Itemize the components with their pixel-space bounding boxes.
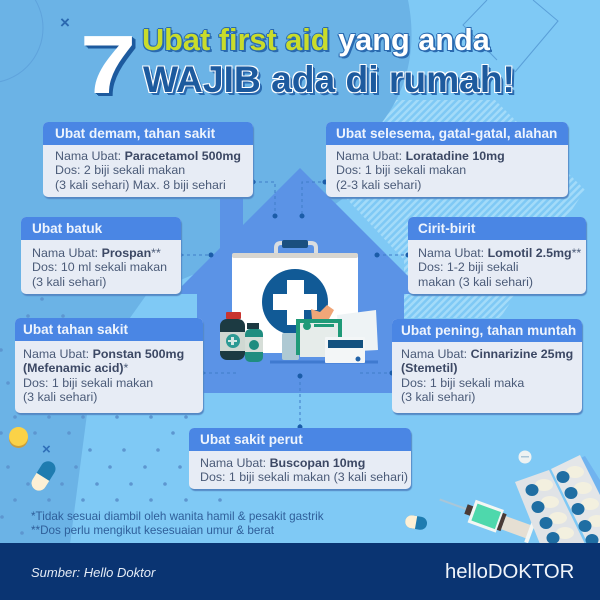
icon: bandage and boxes: [282, 305, 378, 363]
logo: helloDOKTOR: [445, 561, 574, 583]
panel: selesema: [326, 122, 568, 197]
panel: pening: Dos: 1 biji sekali maka: [401, 376, 524, 390]
panel: sakit perut: [189, 428, 411, 489]
panel: tahan sakit: (Mefenamic acid)*: [23, 361, 128, 375]
panel: batuk: Nama Ubat: Prospan**: [32, 246, 161, 260]
icon: white pill: [518, 450, 532, 464]
panel: pening: [392, 319, 582, 413]
title line 2: WAJIB ada di rumah!: [143, 58, 515, 100]
panel: sakit perut: Nama Ubat: Buscopan 10mg: [200, 456, 365, 470]
panel: demam: Nama Ubat: Paracetamol 500mg: [55, 149, 241, 163]
footnote: **Dos perlu mengikut kesesuaian umur & berat: [31, 524, 274, 536]
footer bar: [0, 543, 600, 600]
panel: cirit-birit: makan (3 kali sehari): [418, 275, 533, 289]
icon: small bottle: [245, 323, 263, 362]
panel: pening: (3 kali sehari): [401, 390, 475, 404]
title line 1: Ubat first aid yang anda: [142, 22, 490, 57]
panel: cirit-birit: Dos: 1-2 biji sekali: [418, 260, 519, 274]
panel: demam: [43, 122, 253, 197]
panel: batuk: Dos: 10 ml sekali makan: [32, 260, 167, 274]
panel: selesema: Nama Ubat: Loratadine 10mg: [336, 149, 505, 163]
panel: cirit-birit: Nama Ubat: Lomotil 2.5mg**: [418, 246, 581, 260]
panel: tahan sakit: [15, 318, 203, 413]
title number 7: 7: [80, 18, 136, 111]
icon: blister packs: [515, 455, 600, 546]
icon: first aid kit: [220, 240, 378, 364]
icon: syringe: [436, 488, 536, 544]
panel: selesema: Dos: 1 biji sekali makan: [336, 163, 466, 177]
panel: tahan sakit: Ubat tahan sakit: [23, 322, 128, 337]
footnote: [31, 510, 324, 536]
panel: selesema: (2-3 kali sehari): [336, 178, 421, 192]
panel: demam: Ubat demam, tahan sakit: [55, 126, 215, 141]
source: Sumber: Hello Doktor: [31, 565, 155, 580]
panel: sakit perut: Ubat sakit perut: [200, 432, 303, 447]
panel: batuk: Ubat batuk: [32, 221, 102, 236]
panel: sakit perut: Dos: 1 biji sekali makan (3 kali sehari): [200, 470, 408, 484]
panel: demam: Dos: 2 biji sekali makan: [55, 163, 185, 177]
panel: tahan sakit: (3 kali sehari): [23, 390, 97, 404]
panel: pening: (Stemetil): [401, 361, 457, 375]
panel: demam: (3 kali sehari) Max. 8 biji sehari: [55, 178, 226, 192]
icon: syringe and blister: [405, 450, 600, 543]
panel: batuk: [21, 217, 181, 294]
panel: selesema: Ubat selesema, gatal-gatal, alahan: [336, 126, 557, 141]
panel: tahan sakit: Dos: 1 biji sekali makan: [23, 376, 153, 390]
icon: yellow pill: [9, 427, 28, 446]
panel: pening: Ubat pening, tahan muntah: [401, 323, 576, 338]
panel: cirit-birit: [408, 217, 586, 294]
panel: batuk: (3 kali sehari): [32, 275, 106, 289]
icon: large bottle: [220, 312, 245, 360]
panel: pening: Nama Ubat: Cinnarizine 25mg: [401, 347, 573, 361]
icon: x mark left: ×: [42, 441, 51, 458]
panel: cirit-birit: Cirit-birit: [418, 221, 475, 236]
icon: capsule left: [32, 461, 56, 491]
footnote: *Tidak sesuai diambil oleh wanita hamil & pesakit gastrik: [31, 510, 324, 523]
icon: x mark top: ×: [60, 13, 70, 32]
panel: tahan sakit: Nama Ubat: Ponstan 500mg: [23, 347, 184, 361]
icon: capsule right: [404, 514, 428, 531]
connectors: [178, 180, 410, 430]
